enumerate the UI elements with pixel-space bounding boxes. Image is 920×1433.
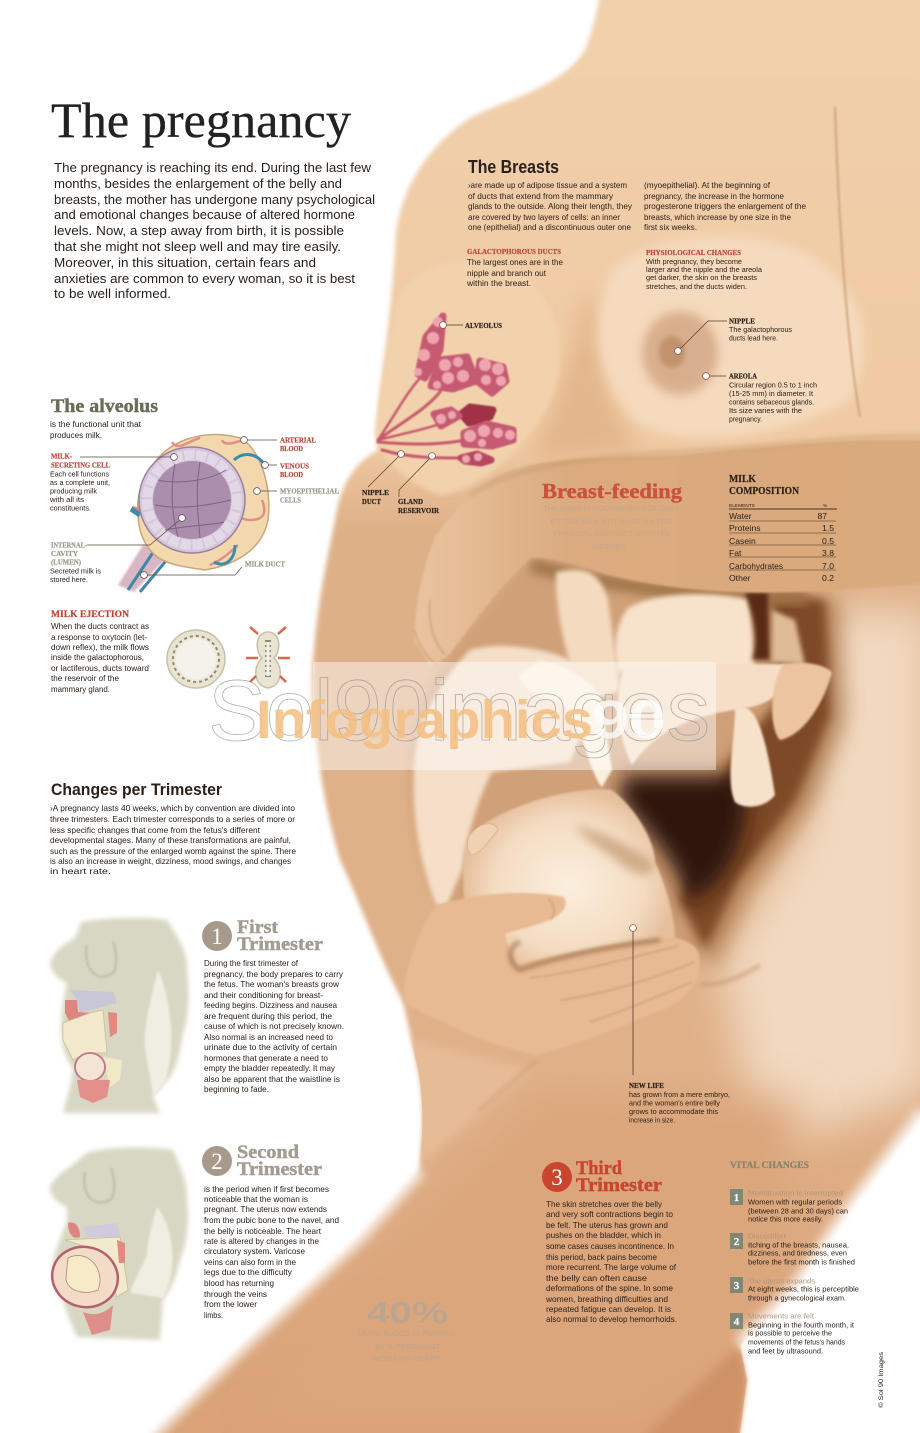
nipple [659, 336, 685, 368]
label: arterial blood [280, 438, 316, 453]
table rows: 1.5 [822, 523, 834, 533]
item 1: notice this more easily. [748, 1214, 823, 1224]
text: third trimester: deformations of the spine. In some [546, 1283, 673, 1293]
text: changes per trimester: in heart rate. [50, 866, 111, 876]
text: breasts columns: of ducts that extend from the mammary [468, 191, 614, 201]
label: milk-secreting cell: SECRETING CELL [51, 462, 110, 470]
gland ducts [378, 378, 465, 458]
text: third trimester: this period, back pains become [546, 1252, 657, 1262]
text: second trimester: veins can also form in the [204, 1257, 296, 1267]
cell wall [139, 447, 245, 553]
text: breast-feeding caption: MOTHER. [593, 542, 628, 551]
label: myoepithelial cells: CELLS [280, 498, 301, 504]
text: first trimester: empty the bladder repeatedly. It may [204, 1063, 336, 1073]
item 1 [730, 1188, 848, 1224]
torso [615, 594, 755, 672]
text: second trimester [204, 1184, 339, 1320]
item 1: 1 [734, 1192, 739, 1204]
item 2 [730, 1232, 855, 1266]
table rows: 0.5 [822, 536, 834, 546]
callout: nipple: ducts lead here. [729, 334, 778, 342]
stat: 40%: 40% [367, 1295, 448, 1330]
text: changes per trimester: three trimesters. Each trimester corresponds to a series of more or [50, 814, 295, 824]
duct vessels [128, 548, 170, 592]
heading: Breast-feeding: Breast-feeding [542, 479, 683, 503]
text: breasts columns: ›are made up of adipose tissue and a system [468, 180, 627, 190]
foot two [731, 707, 775, 807]
text: second trimester: legs due to the difficulty [204, 1267, 293, 1277]
callout: physiological changes: get darker, the skin on the breasts [646, 273, 757, 282]
table rows: 87 [817, 511, 827, 521]
photo: fetus window [410, 558, 845, 980]
intro text: levels. Now, a step away from birth, it is possible [54, 223, 344, 238]
callout: galactophorous ducts: The largest ones are in the [467, 257, 563, 267]
label: arterial blood: ARTERIAL [280, 438, 316, 444]
callout: new life: has grown from a mere embryo, [629, 1090, 730, 1099]
text: changes per trimester [50, 803, 296, 876]
label: milk-secreting cell: as a complete unit, [50, 478, 110, 487]
callout: gland reservoir [398, 453, 439, 515]
text: third trimester: the belly can often cause [546, 1273, 647, 1283]
callout: areola: Circular region 0.5 to 1 inch [729, 380, 817, 390]
table rows: Water [729, 511, 752, 521]
text: breasts columns: breasts, which increase by one size in the [644, 212, 791, 222]
left breast [376, 259, 560, 495]
intestines [63, 1010, 107, 1060]
thigh line [478, 1060, 537, 1111]
text: breast-feeding caption: BY THE MILK BUT ALSO BY THE [550, 517, 672, 526]
label: myoepithelial cells [280, 488, 339, 504]
table rows: Proteins [729, 523, 761, 533]
item 1: Women with regular periods [748, 1198, 842, 1206]
title: The pregnancy [51, 92, 351, 148]
heading: first trimester: Trimester [237, 934, 324, 955]
table rows: Carbohydrates [729, 561, 783, 571]
callout: areola [703, 373, 817, 424]
label: milk-secreting cell: with all its [49, 495, 84, 504]
label: myoepithelial cells: MYOEPITHELIAL [280, 488, 339, 496]
armpit crease [835, 107, 860, 417]
intro text: months, besides the enlargement of the belly and [54, 176, 342, 191]
inner womb wash [410, 558, 829, 975]
table rows: Other [729, 573, 751, 583]
callout: areola: contains sebaceous glands. [729, 398, 814, 406]
shin [618, 664, 786, 765]
heading: milk ejection: MILK EJECTION [51, 610, 129, 620]
text: breasts columns: first six weeks. [644, 222, 697, 232]
text: second trimester: rate is altered by changes in the [204, 1236, 319, 1246]
arm gap [130, 1207, 173, 1298]
small hand [520, 660, 612, 787]
callout: galactophorous ducts: within the breast. [466, 278, 531, 288]
text: first trimester: urinate due to the activity of certain [204, 1042, 337, 1052]
text: first trimester: the fetus. The woman's breasts grow [204, 979, 340, 989]
text: changes per trimester: such as the pressure of the enlarged womb against the spine. There [50, 846, 296, 856]
colon [108, 1012, 117, 1037]
text: third trimester: some cases causes incontinence. In [546, 1241, 674, 1251]
callout: physiological changes: PHYSIOLOGICAL CHANGES [646, 250, 741, 257]
table rows [729, 503, 834, 583]
heading: third trimester: 3 [551, 1165, 563, 1190]
text: first trimester: beginning to fade. [204, 1084, 269, 1094]
intro text: and emotional changes because of altered hormone [54, 207, 355, 222]
text: milk ejection: down reflex), the milk flows [51, 642, 149, 652]
callout: new life [629, 925, 730, 1124]
breast shading [84, 1168, 114, 1203]
back and arm [414, 646, 592, 908]
colon [117, 1240, 125, 1263]
watermark: 90: 90 [592, 690, 666, 750]
text: changes per trimester: less specific changes that come from the fetus's different [50, 825, 261, 835]
uterus [75, 1053, 105, 1081]
text: breasts columns: one (epithelial) and a discontinuous outer one [468, 222, 631, 232]
veins [214, 454, 264, 564]
text: third trimester: and very soft contractions begin to [546, 1209, 673, 1219]
arteries [172, 438, 264, 565]
intro text: breasts, the mother has undergone many psychological [54, 192, 375, 207]
bladder [77, 1080, 110, 1103]
item 3 [730, 1276, 859, 1302]
fingers on forearm [414, 600, 445, 668]
stat: 40%: MORE BLOOD IS PUMPED [358, 1329, 456, 1338]
table rules [729, 509, 837, 570]
text: first trimester: cause of which is not precisely known. [204, 1021, 344, 1031]
icon: contracted duct [246, 627, 290, 688]
text: breast-feeding caption [543, 504, 680, 551]
credit: © Sol 90 Images [877, 1351, 885, 1408]
intro text: Moreover, in this situation, certain fears and [54, 255, 316, 270]
item 2: Discomfort [748, 1232, 786, 1240]
breast shading [86, 942, 116, 977]
label: milk-secreting cell [49, 454, 110, 512]
text: third trimester: women, breathing difficulties and [545, 1294, 668, 1304]
callout: physiological changes: stretches, and the ducts widen. [646, 282, 747, 291]
illustration: mammary glands [378, 316, 515, 463]
item 1: Menstruation is interrupted [748, 1188, 843, 1198]
text: second trimester: is the period when if first becomes [204, 1184, 329, 1194]
list: vital changes [730, 1188, 859, 1356]
item 4: 4 [734, 1316, 740, 1328]
heading: changes per trimester: Changes per Trimester [51, 781, 223, 799]
table rows: ELEMENTS [729, 503, 755, 509]
photo: cradling hand [403, 893, 760, 1111]
pelvic fold [700, 965, 760, 985]
watermark: Infographics: Infographics [256, 690, 593, 750]
right breast [599, 236, 864, 438]
callout: physiological changes: larger and the nipple and the areola [646, 265, 762, 274]
label: venous blood: BLOOD [280, 472, 303, 479]
bladder [83, 1305, 113, 1335]
label: venous blood: VENOUS [280, 464, 309, 470]
text: second trimester: limbs. [204, 1310, 223, 1320]
rear leg [640, 1345, 747, 1433]
text: third trimester: repeated fatigue can develop. It is [546, 1304, 671, 1314]
text: breasts columns [468, 180, 806, 232]
label: milk-secreting cell: MILK- [51, 454, 73, 460]
label: milk duct: MILK DUCT [245, 562, 285, 568]
heading: first trimester [202, 917, 324, 955]
table: milk composition [729, 474, 837, 583]
stat: 40%: BY A PREGNANT [375, 1342, 440, 1351]
callout: gland reservoir: RESERVOIR [398, 508, 439, 515]
fetus [66, 1256, 100, 1292]
table rows: Casein [729, 536, 756, 546]
valley between breasts [536, 302, 632, 457]
red arrows [246, 627, 290, 682]
item 3: At eight weeks, this is perceptible [748, 1284, 859, 1294]
rear hip [412, 1040, 521, 1162]
item 3: through a gynecological exam. [748, 1294, 846, 1302]
text: first trimester [204, 958, 344, 1094]
item 3: The uterus expands [748, 1276, 815, 1286]
text: alveolus intro: is the functional unit that [50, 420, 142, 429]
liver [65, 1000, 92, 1023]
callout: nipple duct [362, 451, 404, 506]
text: first trimester: pregnancy, the body prepares to carry [204, 969, 344, 979]
text: second trimester: from the pubic bone to the navel, and [204, 1215, 339, 1225]
intro text: anxieties are common to every woman, so it is best [54, 271, 355, 286]
callout: new life: NEW LIFE [629, 1083, 664, 1090]
intro text: that she might not sleep well and may tire easily. [54, 239, 341, 254]
item 2: dizziness, and tiredness, even [748, 1248, 847, 1258]
heading: second trimester [202, 1142, 323, 1180]
text: milk ejection: a response to oxytocin (let- [51, 632, 147, 642]
callout: alveolus pointer [440, 322, 502, 330]
lumen lines [155, 462, 231, 538]
text: second trimester: noticeable that the woman is [204, 1194, 308, 1204]
outer layer [138, 435, 269, 570]
callout: alveolus pointers [80, 437, 277, 578]
callout: galactophorous ducts [466, 249, 563, 288]
text: first trimester: are frequent during this period, the [204, 1011, 332, 1021]
item 2: Itching of the breasts, nausea, [748, 1240, 849, 1250]
callout: nipple [675, 318, 792, 354]
callout: areola: AREOLA [729, 374, 757, 380]
callout: nipple duct: DUCT [362, 499, 381, 506]
text: first trimester: Also normal is an increased need to [204, 1032, 333, 1042]
illustration: alveolus [118, 435, 269, 592]
table heading: COMPOSITION [729, 486, 799, 497]
text: milk ejection: or lactiferous, ducts toward [51, 663, 149, 673]
intro text [54, 160, 375, 301]
text: changes per trimester: is also an increase in weight, dizziness, mood swings, and changes [50, 856, 291, 866]
text: third trimester: The skin stretches over the belly [546, 1199, 663, 1209]
label: internal cavity: CAVITY [51, 551, 78, 558]
heading: third trimester: Third [576, 1158, 622, 1179]
label: milk-secreting cell: constituents. [50, 504, 91, 512]
watermark: Sol90images: Sol90images [208, 663, 710, 759]
text: breast-feeding caption: THE BABY IS NOURISHED NOT ONLY [543, 504, 680, 513]
item 2: before the first month is finished [748, 1258, 855, 1266]
womb outer glow [680, 590, 845, 970]
photo: forearm [414, 436, 920, 668]
text: milk ejection [51, 621, 149, 694]
label: internal cavity: Secreted milk is [50, 566, 101, 576]
text: second trimester: through the veins [204, 1289, 267, 1299]
duct [118, 545, 172, 592]
text: first trimester: and their conditioning for breast- [204, 990, 323, 1000]
text: second trimester: the belly is noticeable. The heart [204, 1226, 322, 1236]
callout: nipple duct: NIPPLE [362, 490, 389, 497]
text: second trimester: blood has returning [204, 1278, 274, 1288]
dark cavity [620, 775, 747, 905]
heading: second trimester: Trimester [237, 1159, 323, 1180]
illustration: second trimester body [45, 1148, 188, 1340]
callout: galactophorous ducts: nipple and branch out [467, 268, 547, 278]
label: internal cavity: INTERNAL- [51, 542, 88, 550]
heading: second trimester: 2 [211, 1149, 223, 1174]
ear [467, 824, 498, 855]
icon: relaxed duct [167, 630, 225, 688]
callout: new life: and the woman's entire belly [629, 1098, 720, 1108]
text: third trimester: pushes on the bladder, which in [546, 1230, 661, 1240]
table rows: Fat [729, 548, 742, 558]
item 4: Beginning in the fourth month, it [748, 1320, 854, 1330]
callout: areola: Its size varies with the [729, 406, 802, 415]
thumb and finger lines [530, 898, 695, 1022]
intro text: The pregnancy is reaching its end. During the last few [54, 160, 371, 175]
foot one [772, 663, 832, 740]
callout: new life: grows to accommodate this [629, 1107, 718, 1116]
uterus [45, 1239, 125, 1315]
text: third trimester: be felt. The uterus has grown and [546, 1220, 668, 1230]
belly light right side [720, 610, 920, 1150]
heading: The Breasts: The Breasts [468, 157, 559, 177]
intro text: to be well informed. [54, 286, 171, 301]
heading: third trimester [542, 1158, 663, 1196]
illustration: first trimester body [50, 918, 188, 1113]
thigh shading [496, 1078, 816, 1186]
text: breasts columns: are covered by two layers of cells: an inner [468, 212, 620, 222]
label: internal cavity [50, 542, 101, 584]
cell ring [147, 455, 237, 545]
text: third trimester: more recurrent. The large volume of [546, 1262, 677, 1272]
text: first trimester: feeding begins. Dizziness and nausea [204, 1000, 337, 1010]
text: third trimester [545, 1199, 677, 1324]
text: milk ejection: mammary gland. [51, 684, 110, 694]
intestines [65, 1237, 128, 1297]
table rows: % [823, 503, 828, 509]
text: second trimester: pregnant. The uterus now extends [204, 1204, 327, 1214]
palm cast shadow [511, 940, 660, 970]
thigh [556, 570, 620, 696]
text: breasts columns: progesterone triggers the enlargement of the [644, 201, 806, 211]
item 1: (between 28 and 30 days) can [748, 1206, 848, 1216]
label: arterial blood: BLOOD [280, 446, 303, 453]
text: alveolus intro: produces milk. [50, 431, 102, 440]
callout: physiological changes: With pregnancy, they become [646, 257, 742, 266]
text: changes per trimester: ›A pregnancy lasts 40 weeks, which by convention are divided into [50, 803, 295, 813]
text: third trimester: also normal to develop hemorrhoids. [546, 1314, 677, 1324]
label: internal cavity: stored here. [50, 575, 88, 584]
alveoli highlights [414, 317, 515, 463]
heading: first trimester: First [237, 917, 279, 938]
item 4: Movements are felt [748, 1312, 814, 1320]
table heading: MILK [729, 474, 757, 485]
arm gap [145, 970, 171, 1097]
text: breasts columns: pregnancy, the increase in the hormone [644, 191, 784, 201]
heading: The alveolus: The alveolus [51, 396, 158, 417]
item 4 [730, 1312, 854, 1356]
table rows: 7.0 [822, 561, 834, 571]
lumen [153, 461, 231, 539]
arm shadow [531, 565, 806, 598]
text: breasts columns: (myoepithelial). At the beginning of [644, 180, 771, 190]
text: breast-feeding caption: PHYSICAL CONTACT WITH ITS [553, 529, 670, 538]
text: milk ejection: the reservoir of the [51, 673, 119, 683]
text: second trimester: circulatory system. Varicose [204, 1246, 305, 1256]
text: milk ejection: inside the galactophorous, [51, 652, 144, 662]
callout: nipple: NIPPLE [729, 318, 755, 326]
callout: new life: increase in size. [629, 1116, 675, 1124]
callout: physiological changes [646, 250, 762, 291]
label: milk-secreting cell: Each cell functions [50, 470, 109, 478]
item 4: is possible to perceive the [748, 1328, 832, 1338]
heading: third trimester: Trimester [576, 1175, 663, 1196]
body shading [260, 300, 920, 1433]
placenta fold [772, 610, 805, 665]
areola [642, 311, 718, 395]
callout: galactophorous ducts: GALACTOPHOROUS DUCTS [467, 249, 561, 256]
text: first trimester: also be apparent that the waistline is [204, 1074, 340, 1084]
text: first trimester: hormones that generate a need to [204, 1053, 328, 1063]
text: changes per trimester: developmental stages. Many of these transformations are painful, [50, 835, 291, 845]
alveoli lobes [418, 316, 513, 463]
cord [745, 592, 770, 660]
text: breasts columns: glands to the outside. Along their length, they [468, 201, 633, 211]
table heading [729, 474, 799, 497]
stomach [70, 990, 117, 1013]
callout: areola: (15-25 mm) in diameter. It [729, 389, 813, 398]
callout: gland reservoir: GLAND [398, 499, 423, 506]
item 4: and feet by ultrasound. [748, 1346, 823, 1356]
item 3: 3 [734, 1280, 740, 1292]
text: milk ejection: When the ducts contract as [51, 621, 149, 631]
heading: first trimester: 1 [211, 924, 223, 949]
label: milk-secreting cell: producing milk [50, 486, 97, 496]
item 4: movements of the fetus's hands [748, 1338, 845, 1346]
table rows: 0.2 [822, 573, 834, 583]
head [463, 789, 675, 980]
heading: second trimester: Second [237, 1142, 299, 1163]
liver [68, 1222, 80, 1238]
stat: 40%: WOMAN'S HEART [372, 1354, 440, 1363]
breast crease shadow [470, 436, 920, 495]
text: alveolus intro [50, 420, 142, 440]
callout: nipple: The galactophorous [729, 325, 792, 334]
callout: areola: pregnancy. [729, 414, 762, 424]
skin shadow on face [575, 825, 655, 875]
callout: alveolus pointer: ALVEOLUS [465, 323, 502, 330]
text: first trimester: During the first trimester of [204, 958, 299, 968]
stomach [83, 1223, 120, 1237]
soft edge: thigh and shoulder [145, 1112, 920, 1433]
text: second trimester: from the lower [204, 1299, 257, 1309]
watermark band [208, 662, 716, 770]
heading: vital changes: VITAL CHANGES [730, 1161, 809, 1171]
table rows: 3.8 [822, 548, 834, 558]
label: internal cavity: (LUMEN) [51, 560, 81, 566]
womb brown right [680, 595, 830, 950]
label: venous blood [280, 464, 309, 479]
item 2: 2 [734, 1236, 740, 1248]
stat: 40% [358, 1295, 456, 1363]
